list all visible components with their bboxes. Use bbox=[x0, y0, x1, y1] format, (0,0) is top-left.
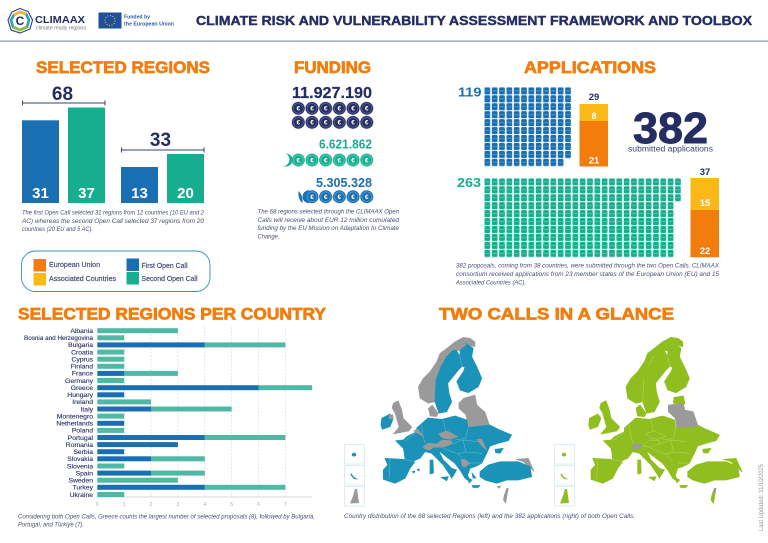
caption: 382 proposals, coming from 38 countries, were submitted through the two Open Calls. CLIMAAX bbox=[456, 263, 720, 270]
insets: right map bbox=[554, 444, 574, 506]
bar chart: 2 bbox=[150, 502, 153, 508]
bar chart: Slovakia bbox=[67, 456, 93, 463]
bar chart: Greece bbox=[71, 385, 93, 392]
logo: CLIMAAX: CLIMAAX bbox=[35, 14, 85, 26]
coins: second call: € bbox=[310, 157, 314, 164]
bar: first call 31: 31 bbox=[32, 185, 49, 202]
map: applications bbox=[589, 337, 742, 503]
legend: First Open Call bbox=[142, 261, 188, 270]
heading: APPLICATIONS bbox=[524, 59, 656, 77]
panel: funding bbox=[258, 59, 399, 240]
bar chart: Spain bbox=[76, 470, 93, 477]
caption: The first Open Call selected 31 regions from 12 countries (10 EU and 2 bbox=[22, 209, 204, 216]
logo: EU flag and funding note bbox=[98, 12, 174, 28]
bar chart: Germany bbox=[65, 378, 94, 385]
coins: second call: € bbox=[324, 157, 328, 164]
coins: total: € bbox=[337, 120, 341, 127]
bar chart: Finland bbox=[71, 364, 93, 371]
bar: second call 37: 37 bbox=[78, 185, 95, 202]
caption: consortium received applications from 23 member states of the European Union (EU) and 15 bbox=[456, 271, 719, 278]
bar chart: Poland bbox=[72, 428, 93, 435]
bracket total 33 bbox=[122, 130, 204, 152]
coins: total: € bbox=[365, 106, 369, 113]
bar chart: Sweden bbox=[68, 478, 93, 484]
heading: TWO CALLS IN A GLANCE bbox=[439, 306, 674, 324]
bar: first call 13 bbox=[121, 167, 158, 203]
bar chart: Bulgaria bbox=[68, 342, 93, 349]
caption: The 68 regions selected through the CLIMAAX Open bbox=[258, 208, 399, 216]
coins: first call: € bbox=[337, 194, 341, 201]
coins: first call: € bbox=[351, 194, 355, 201]
heading: SELECTED REGIONS bbox=[36, 59, 210, 77]
bar chart: Ukraine bbox=[70, 492, 93, 499]
coins: total: € bbox=[365, 120, 369, 127]
bar: second call 20 bbox=[167, 154, 204, 203]
bar chart: Ireland bbox=[72, 399, 93, 406]
coins: total: € bbox=[324, 106, 328, 113]
logo: CLIMAAX bbox=[8, 8, 86, 33]
legend: European Union bbox=[49, 260, 100, 269]
waffle: first call 119: 119 bbox=[458, 84, 482, 100]
title: CLIMATE RISK AND VULNERABILITY ASSESSMENT FRAMEWORK AND TOOLBOX bbox=[196, 13, 752, 28]
caption bbox=[258, 208, 399, 240]
caption: AC) whereas the second Open Call selected 37 regions from 20 bbox=[21, 218, 204, 225]
panel: selected regions per country bbox=[18, 306, 326, 529]
stacked bar: second call bbox=[690, 167, 719, 257]
bar chart: Turkey bbox=[72, 485, 94, 492]
bar chart: Italy bbox=[81, 406, 94, 413]
bar chart: 7 bbox=[284, 502, 287, 508]
coins: total: € bbox=[351, 106, 355, 113]
coins: first call: € bbox=[310, 194, 314, 201]
bar chart: Romania bbox=[66, 442, 93, 449]
bar chart: 6 bbox=[257, 502, 260, 508]
caption: countries (20 EU and 5 AC). bbox=[22, 226, 93, 233]
bar chart: 4 bbox=[203, 502, 206, 508]
stacked bar: first call: 8 bbox=[591, 111, 597, 121]
caption: funding by the EU Mission on Adaptation to Climate bbox=[258, 225, 399, 232]
panel: two calls in a glance bbox=[344, 306, 742, 520]
legend: Second Open Call bbox=[142, 274, 198, 283]
stacked bar: first call bbox=[580, 92, 608, 166]
first call amount: 5.305.328 bbox=[316, 176, 372, 190]
coins: second call bbox=[282, 153, 374, 167]
bar: first call 13: 13 bbox=[131, 185, 148, 202]
bar: second call 20: 20 bbox=[177, 185, 194, 202]
panel: applications bbox=[455, 59, 720, 286]
bar chart bbox=[24, 327, 312, 508]
heading: SELECTED REGIONS PER COUNTRY bbox=[18, 306, 326, 324]
stacked bar: first call: 29 bbox=[589, 92, 599, 103]
coins: total: € bbox=[310, 120, 314, 127]
total 382: 382 bbox=[633, 104, 708, 153]
bar chart: 1 bbox=[123, 502, 126, 508]
bar chart: Cyprus bbox=[71, 356, 94, 364]
last updated note: Last Updated: 31/10/2025 bbox=[759, 463, 765, 531]
caption: Calls will receive about EUR 12 million cumulated bbox=[258, 217, 399, 224]
coins: second call: € bbox=[337, 157, 341, 164]
heading: FUNDING bbox=[294, 59, 371, 77]
caption: Considering both Open Calls, Greece counts the largest number of selected proposals (8), followed by Bulgaria, bbox=[18, 513, 315, 520]
bar chart: 3 bbox=[177, 502, 180, 508]
logo: EU flag and funding note: the European Union bbox=[124, 22, 174, 28]
coins: second call: € bbox=[296, 157, 300, 164]
bar chart: Portugal bbox=[68, 435, 93, 442]
map: selected regions bbox=[381, 337, 534, 503]
stacked bar: first call: 21 bbox=[589, 156, 600, 166]
bar chart: France bbox=[72, 371, 93, 378]
logo: EU flag and funding note: Funded by bbox=[124, 14, 150, 20]
coins: total: € bbox=[351, 120, 355, 127]
bar chart: Montenegro bbox=[57, 413, 93, 420]
stacked bar: second call: 22 bbox=[700, 246, 710, 257]
caption: Associated Countries (AC). bbox=[455, 279, 526, 286]
bar chart: Bosnia and Herzegovina bbox=[24, 335, 93, 342]
coins: second call: € bbox=[365, 157, 369, 164]
coins: first call: € bbox=[324, 194, 328, 201]
bar chart: 0 bbox=[96, 502, 99, 508]
bracket total 33: 33 bbox=[150, 130, 171, 151]
logo: CLIMAAX: climate ready regions bbox=[36, 26, 86, 32]
coins: total: € bbox=[310, 106, 314, 113]
coins: total: € bbox=[296, 106, 300, 113]
coins: total bbox=[292, 102, 374, 130]
bracket total 68: 68 bbox=[52, 84, 73, 105]
bar: first call 31 bbox=[22, 120, 59, 203]
coins: total: € bbox=[296, 120, 300, 127]
bar chart: Slovenia bbox=[67, 463, 93, 470]
coins: first call: € bbox=[365, 194, 369, 201]
bar chart: Albania bbox=[70, 328, 93, 335]
bar chart: Serbia bbox=[73, 449, 93, 456]
caption: Change. bbox=[258, 234, 280, 240]
coins: total: € bbox=[337, 106, 341, 113]
header bbox=[8, 8, 752, 33]
bar: second call 37 bbox=[68, 108, 105, 203]
coins: first call bbox=[298, 190, 374, 204]
caption: Portugal, and Türkiye (7). bbox=[18, 522, 84, 529]
caption bbox=[21, 209, 204, 233]
second call amount: 6.621.862 bbox=[319, 138, 372, 152]
legend: Associated Countries bbox=[49, 274, 116, 283]
bracket total 68 bbox=[22, 84, 105, 106]
waffle: first call 119 bbox=[458, 84, 572, 167]
waffle: second call 263 bbox=[457, 175, 682, 258]
bar chart: Netherlands bbox=[56, 421, 94, 428]
logo: CLIMAAX: C bbox=[16, 14, 25, 28]
insets: left map bbox=[344, 444, 364, 506]
bar chart: Hungary bbox=[67, 392, 94, 399]
caption bbox=[18, 513, 315, 529]
bar chart: 5 bbox=[230, 502, 233, 508]
total 382: submitted applications bbox=[628, 144, 713, 153]
stacked bar: second call: 15 bbox=[700, 198, 711, 209]
coins: second call: € bbox=[351, 157, 355, 164]
caption bbox=[455, 263, 720, 286]
legend bbox=[22, 251, 210, 292]
waffle: second call 263: 263 bbox=[457, 175, 481, 190]
coins: total: € bbox=[324, 120, 328, 127]
total amount: 11.927.190 bbox=[292, 85, 372, 102]
bar chart: Croatia bbox=[71, 349, 93, 356]
panel: selected regions bbox=[21, 59, 210, 233]
stacked bar: second call: 37 bbox=[700, 167, 710, 178]
caption: Country distribution of the 68 selected Regions (left) and the 382 applications (right) of both Open Calls. bbox=[344, 513, 635, 520]
